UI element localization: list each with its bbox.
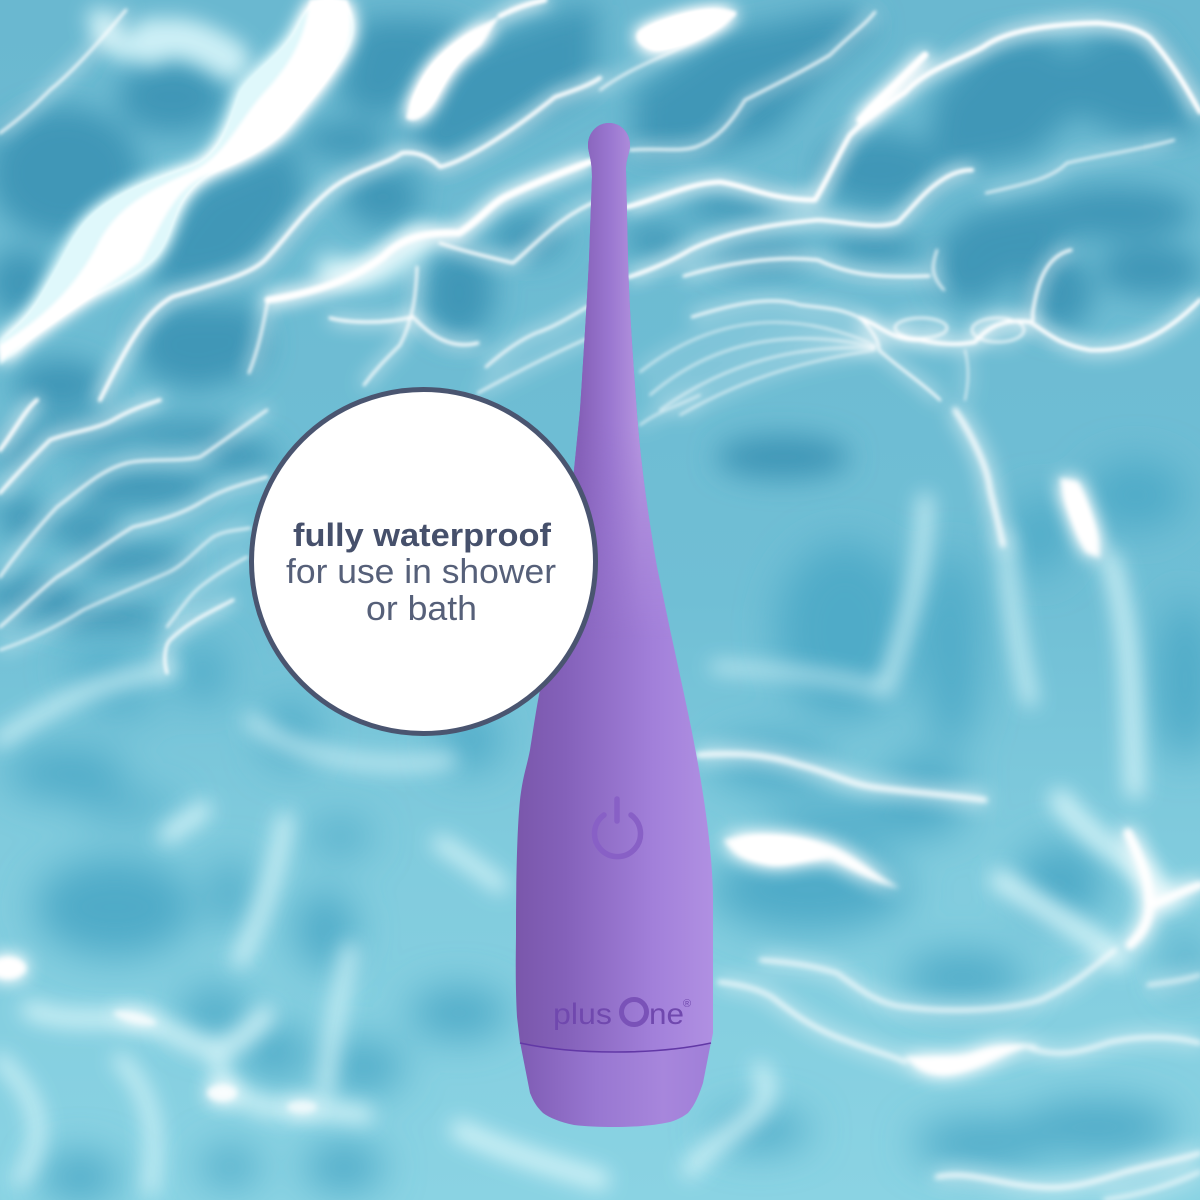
brand logo: ne [649,998,684,1031]
caustic light bands, upper [0,0,1200,673]
brand logo: ® [683,998,691,1010]
callout text [286,553,556,628]
brand logo [553,998,691,1031]
left middle lines [0,400,37,450]
brand logo: plus [553,998,612,1031]
broad bright band [0,0,353,365]
upper right lines [630,12,875,150]
cap seam [520,1043,711,1052]
lower body above seam [520,1040,711,1052]
callout text: or bath [366,590,477,628]
product: purple device [516,110,713,1127]
mid diagonal lines [100,78,600,400]
device end cap [520,1042,711,1127]
ripple fan [640,322,875,372]
callout text: for use in shower [286,553,556,591]
dark water cells, lower half [7,460,1200,1200]
dark water cells, upper half [0,10,1195,625]
callout heading: fully waterproof [293,517,551,553]
callout circle [252,390,596,734]
device body [516,123,713,1043]
caustic light bands, lower [0,410,1200,1200]
power icon [595,799,641,857]
device neck shading [574,123,655,568]
